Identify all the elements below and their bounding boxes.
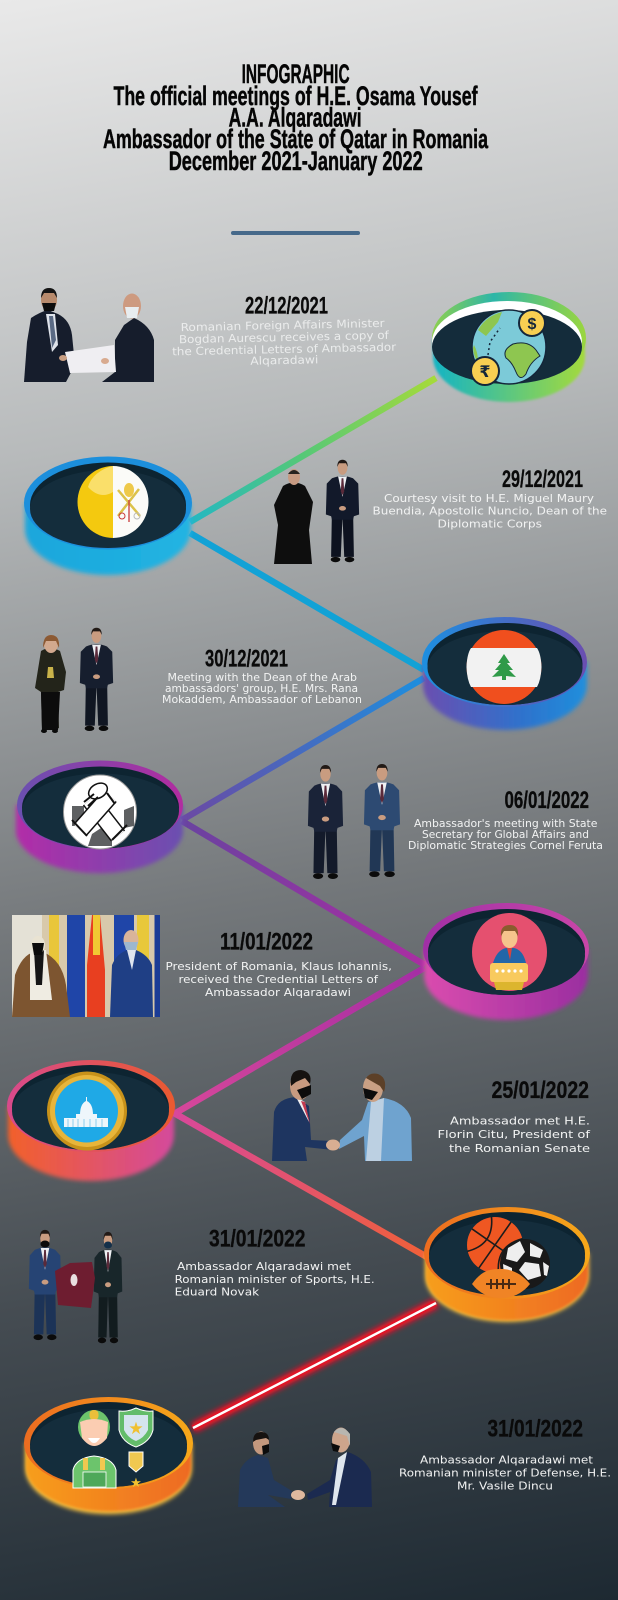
connector: handshake to speaker: [182, 821, 425, 965]
photo: President Iohannis with ambassador and flags: [12, 915, 160, 1017]
title underline bar: [231, 231, 360, 235]
description: Ambassador's meeting with State: [414, 817, 598, 830]
icon: globe with coins: ₹: [479, 362, 491, 381]
photo: holding the Qatar jersey: [29, 1230, 122, 1343]
description: Diplomatic Strategies Cornel Feruta: [408, 839, 603, 852]
icon: capitol building badge: [47, 1072, 127, 1150]
icon: soldier, shield and medal: [73, 1408, 153, 1491]
description: Bogdan Aurescu receives a copy of: [179, 329, 390, 346]
photo: handing over the letters: [24, 288, 154, 382]
date: 25/01/2022: [492, 1077, 589, 1104]
description: Courtesy visit to H.E. Miguel Maury: [384, 492, 595, 505]
description: [166, 960, 392, 999]
icon: speaker at podium: [472, 913, 547, 991]
photo: ambassador of Lebanon and ambassador: [35, 628, 113, 733]
panel: meeting 11/01/2022: [12, 915, 392, 1017]
description: Romanian minister of Sports, H.E.: [175, 1273, 375, 1286]
icon: globe with coins: [471, 310, 546, 385]
date: 11/01/2022: [220, 928, 313, 955]
icon: soldier, shield and medal: ★: [128, 1419, 144, 1439]
description: Buendia, Apostolic Nuncio, Dean of the: [372, 504, 607, 518]
description: the Romanian Senate: [449, 1142, 590, 1155]
date: 22/12/2021: [245, 292, 328, 319]
description: [162, 671, 362, 706]
connector: capitol to sports: [174, 1113, 427, 1257]
disc: handshake: [16, 760, 183, 873]
panel: meeting 30/12/2021: [35, 628, 362, 733]
panel: meeting 22/12/2021: [24, 288, 397, 382]
description: Florin Citu, President of: [438, 1128, 591, 1141]
description: the Credential Letters of Ambassador: [172, 341, 397, 358]
description: Romanian Foreign Affairs Minister: [180, 317, 385, 334]
connector: Lebanon to handshake: [182, 678, 424, 820]
description: Ambassador Alqaradawi met: [177, 1260, 352, 1273]
connector: Vatican to Lebanon: [190, 533, 424, 670]
description: Ambassador Alqaradawi met: [420, 1454, 594, 1466]
description: Ambassador Alqaradawi: [205, 986, 351, 999]
description: [175, 1260, 375, 1298]
disc: sports: [424, 1206, 590, 1322]
disc: speaker: [423, 903, 589, 1020]
description: ambassadors' group, H.E. Mrs. Rana: [165, 682, 358, 695]
disc: Vatican: [24, 456, 192, 575]
disc: globe: [432, 292, 586, 402]
title: INFOGRAPHIC: [242, 59, 350, 89]
description: Ambassador met H.E.: [450, 1114, 590, 1128]
description: received the Credential Letters of: [178, 973, 379, 986]
icon: basketball, soccer ball, football: [456, 1206, 550, 1298]
description: Mokaddem, Ambassador of Lebanon: [162, 693, 362, 706]
photo: handshake with Vasile Dincu: [238, 1428, 372, 1507]
panel: meeting 29/12/2021: [274, 460, 607, 564]
disc: military: [24, 1397, 193, 1514]
date: 30/12/2021: [205, 646, 288, 673]
description: [399, 1454, 611, 1492]
icon: soldier, shield and medal: ★: [130, 1476, 142, 1491]
description: Romanian minister of Defense, H.E.: [399, 1466, 611, 1480]
description: Eduard Novak: [175, 1286, 260, 1298]
title: A.A. Alqaradawi: [229, 103, 362, 133]
photo: priest and ambassador: [274, 460, 359, 564]
title: December 2021-January 2022: [169, 146, 423, 176]
disc: Lebanon: [422, 617, 587, 730]
icon: Vatican flag: [78, 466, 148, 538]
panel: meeting 06/01/2022: [308, 764, 603, 879]
disc: capitol: [7, 1060, 175, 1181]
date: 31/01/2022: [209, 1226, 306, 1253]
description: Mr. Vasile Dincu: [457, 1480, 553, 1492]
panel: meeting 31/01/2022 sports: [29, 1226, 375, 1343]
icon: Lebanon flag: [466, 630, 542, 704]
icon: globe with coins: $: [528, 316, 537, 333]
date: 31/01/2022: [488, 1416, 583, 1443]
description: Secretary for Global Affairs and: [422, 828, 589, 841]
description: Diplomatic Corps: [438, 518, 542, 530]
description: Alqaradawi: [250, 353, 318, 368]
description: [438, 1114, 591, 1155]
photo: ambassador and state secretary: [308, 764, 400, 879]
photo: handshake with Florin Citu: [272, 1070, 412, 1161]
description: [408, 817, 603, 852]
panel: meeting 31/01/2022 defense: [238, 1416, 611, 1507]
connector: neon line sports to military: [193, 1303, 436, 1428]
title: [103, 59, 489, 176]
icon: arm-wrestling handshake: [64, 775, 136, 849]
connector: Vatican to globe: [190, 378, 436, 522]
description: President of Romania, Klaus Iohannis,: [166, 960, 392, 973]
description: Meeting with the Dean of the Arab: [168, 671, 357, 684]
connector: speaker to capitol: [174, 968, 424, 1114]
description: [372, 492, 607, 530]
panel: meeting 25/01/2022: [272, 1070, 591, 1161]
description: [171, 317, 397, 369]
